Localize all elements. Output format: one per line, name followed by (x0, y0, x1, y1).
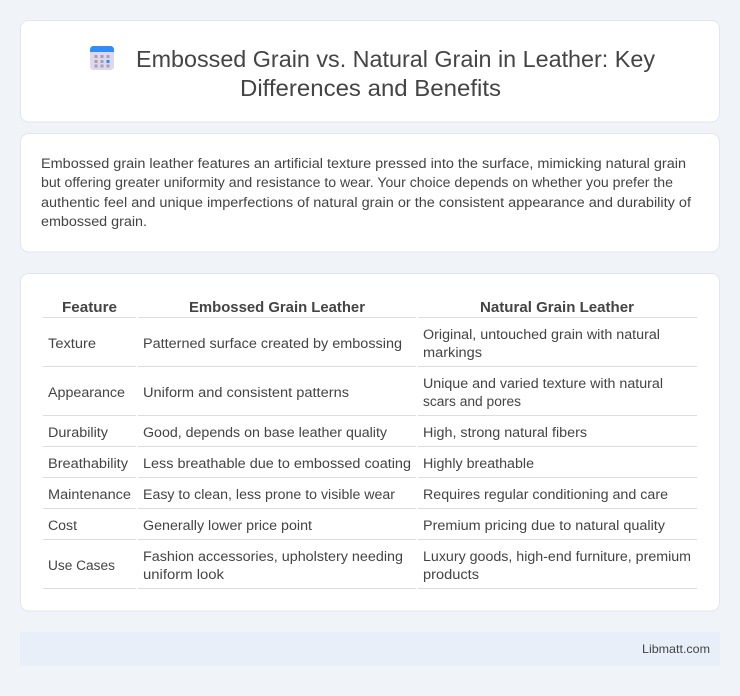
row: appearance: Uniform and consistent patterns (143, 385, 349, 401)
footer: Libmatt.com (642, 642, 710, 656)
text block: intro: but offering greater uniformity and resistance to wear. Your choice depends on whether you prefer the (41, 175, 673, 191)
text block: intro (41, 156, 691, 230)
row: durability: Durability (48, 425, 109, 441)
text block: intro: Embossed grain leather features an artificial texture pressed into the surface, mimicking natural grain (41, 156, 686, 172)
row: maintenance: Easy to clean, less prone to visible wear (143, 487, 395, 503)
row: breathability: Highly breathable (423, 456, 534, 472)
row: breathability: Breathability (48, 456, 129, 472)
row: maintenance: Maintenance (48, 487, 131, 503)
footer (20, 632, 720, 666)
row: use cases: Use Cases (48, 558, 115, 574)
table header (62, 299, 634, 316)
row: texture (48, 327, 660, 361)
panel: title card (20, 20, 720, 122)
icon: calendar (90, 46, 114, 70)
row: breathability (48, 456, 534, 472)
table header: Natural Grain Leather (480, 299, 634, 316)
row: use cases: uniform look (143, 567, 225, 583)
panel: intro paragraph (20, 134, 720, 252)
row: use cases (48, 549, 691, 583)
title: Differences and Benefits (240, 75, 501, 101)
row: appearance (48, 376, 663, 410)
row: appearance: Unique and varied texture with natural (423, 376, 663, 392)
title: Embossed Grain vs. Natural Grain in Leather: Key (136, 46, 655, 72)
row: use cases: Fashion accessories, upholstery needing (143, 549, 403, 565)
row: texture: Original, untouched grain with natural (423, 327, 660, 343)
title (136, 46, 655, 101)
row: use cases: products (423, 567, 479, 583)
table header: Embossed Grain Leather (189, 299, 365, 316)
row: appearance: Appearance (48, 385, 125, 401)
row: texture: Texture (48, 336, 96, 352)
row: cost: Generally lower price point (143, 518, 312, 534)
row: breathability: Less breathable due to embossed coating (143, 456, 411, 472)
row: maintenance (48, 487, 668, 503)
row: maintenance: Requires regular conditioning and care (423, 487, 668, 503)
text block: intro: embossed grain. (41, 214, 147, 230)
row: cost: Premium pricing due to natural quality (423, 518, 666, 534)
row: cost (48, 518, 666, 534)
panel: comparison table (20, 274, 720, 611)
row: durability: Good, depends on base leather quality (143, 425, 388, 441)
row: use cases: Luxury goods, high-end furniture, premium (423, 549, 691, 565)
row: texture: markings (423, 345, 482, 361)
text block: intro: authentic feel and unique imperfections of natural grain or the consistent appearance and durability of (41, 195, 691, 211)
row: texture: Patterned surface created by embossing (143, 336, 402, 352)
row: appearance: scars and pores (423, 394, 521, 410)
table header: Feature (62, 299, 117, 316)
row: durability: High, strong natural fibers (423, 425, 587, 441)
row: cost: Cost (48, 518, 77, 534)
row: durability (48, 425, 587, 441)
